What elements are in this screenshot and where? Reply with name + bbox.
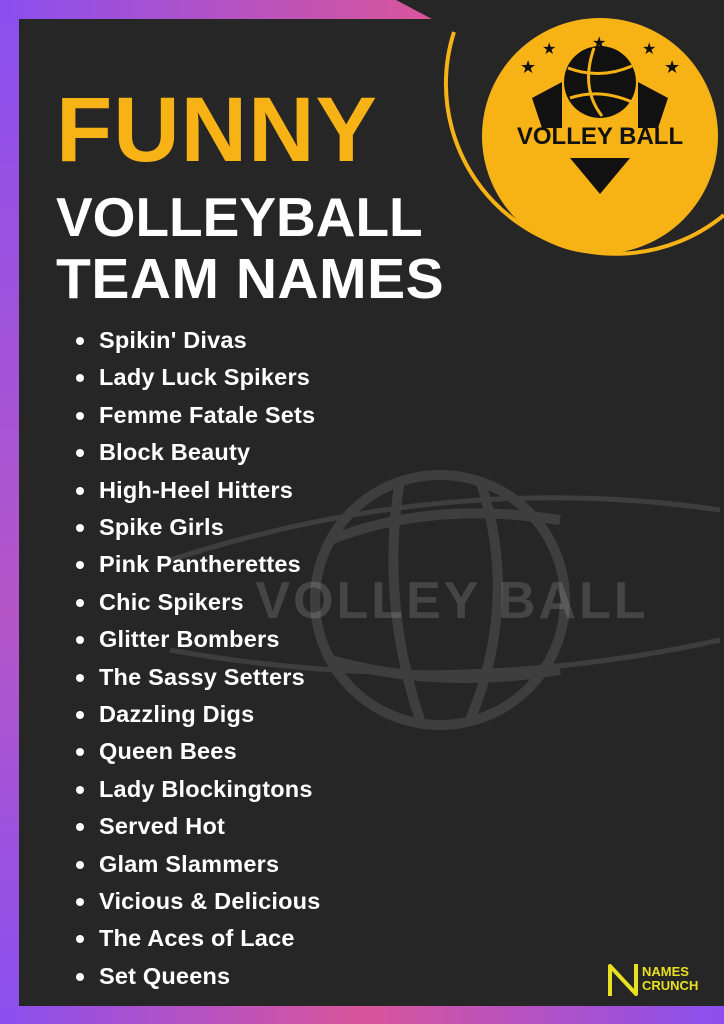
watermark volleyball: VOLLEY BALL — [255, 572, 649, 630]
list of names: Lady Luck Spikers — [99, 364, 310, 390]
list of names: Pink Pantherettes — [99, 551, 301, 577]
frame gradient bottom — [0, 1006, 724, 1024]
list of names: Block Beauty — [99, 439, 250, 465]
list of names: Chic Spikers — [99, 589, 244, 615]
title — [56, 79, 444, 311]
title: TEAM NAMES — [56, 247, 444, 311]
brand logo: names crunch — [608, 964, 698, 996]
title: VOLLEYBALL — [56, 186, 423, 248]
frame gradient left — [0, 0, 19, 1024]
list of names — [76, 327, 320, 989]
logo badge: VOLLEY BALL — [517, 123, 683, 150]
list of names: Glam Slammers — [99, 851, 279, 877]
list of names: Spike Girls — [99, 514, 224, 540]
list of names: The Aces of Lace — [99, 925, 295, 951]
logo badge: ★ — [592, 35, 606, 52]
brand logo: names crunch: CRUNCH — [642, 978, 698, 993]
list of names: High-Heel Hitters — [99, 477, 293, 503]
logo badge — [482, 18, 718, 254]
list of names: Vicious & Delicious — [99, 888, 320, 914]
list of names: Served Hot — [99, 813, 225, 839]
list of names: Spikin' Divas — [99, 327, 247, 353]
list of names: Femme Fatale Sets — [99, 402, 315, 428]
logo badge: ★ — [542, 41, 556, 58]
list of names: Dazzling Digs — [99, 701, 254, 727]
list of names: Set Queens — [99, 963, 230, 989]
list of names: Lady Blockingtons — [99, 776, 313, 802]
brand logo: names crunch: NAMES — [642, 964, 689, 979]
list of names: The Sassy Setters — [99, 664, 305, 690]
frame gradient top strip — [0, 0, 432, 19]
list of names: Queen Bees — [99, 738, 237, 764]
logo ring arc — [444, 31, 724, 256]
logo badge: ★ — [520, 57, 536, 77]
logo badge: ★ — [642, 41, 656, 58]
list of names: Glitter Bombers — [99, 626, 280, 652]
logo badge: ★ — [664, 57, 680, 77]
title: FUNNY — [56, 79, 378, 181]
